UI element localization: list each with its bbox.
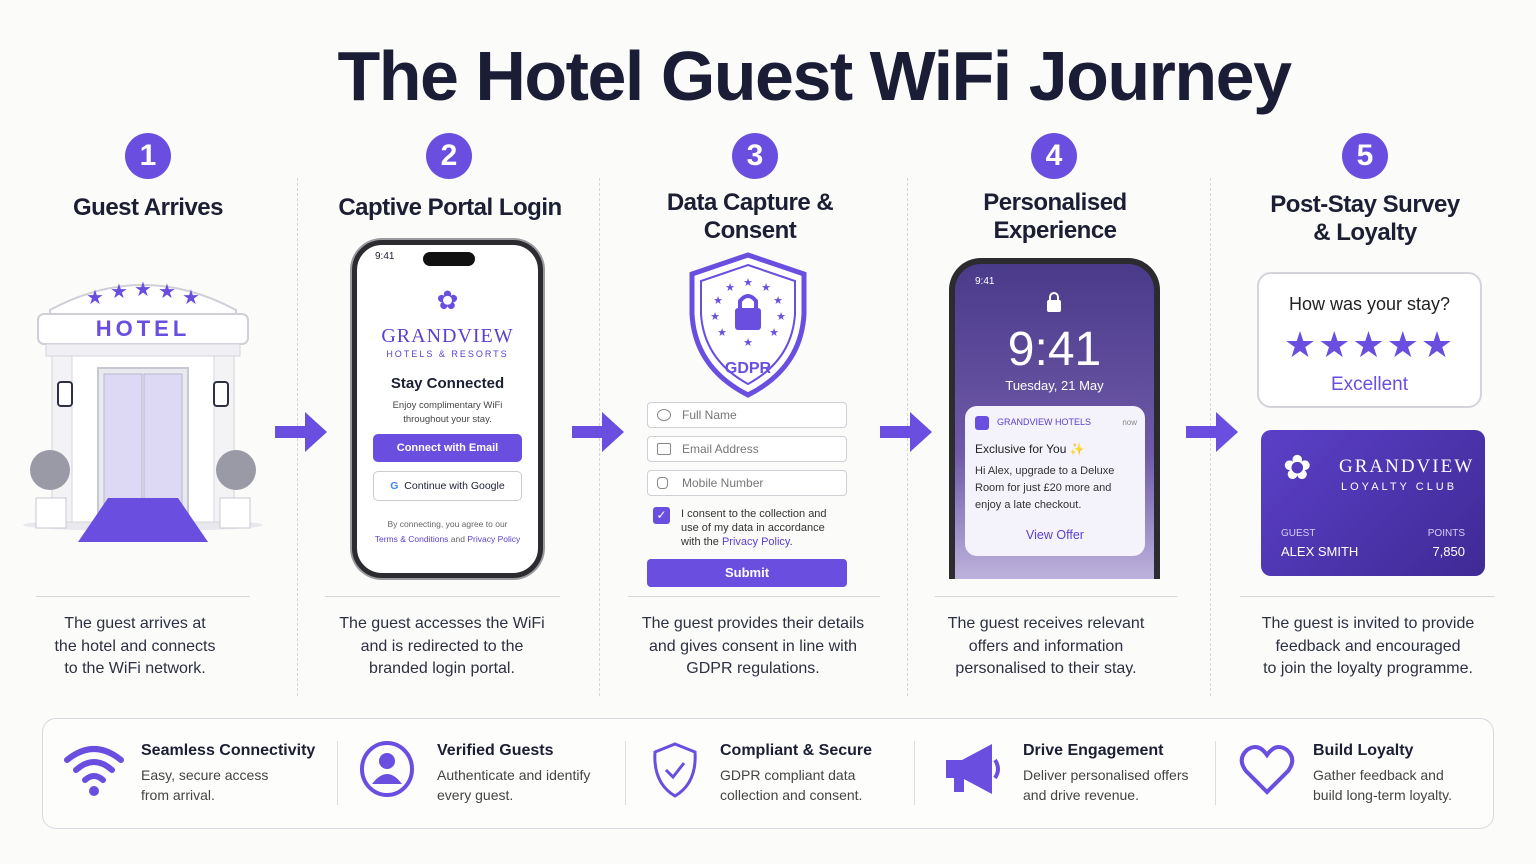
illustration: lock screen phone: Hi Alex, upgrade to a Deluxe bbox=[975, 465, 1114, 477]
illustration: survey bubble: ★★★★★ bbox=[1284, 324, 1455, 365]
text: branded login portal. bbox=[369, 660, 515, 677]
step numbers: 5 bbox=[1357, 139, 1373, 172]
illustration: GDPR shield: ★ bbox=[710, 311, 720, 323]
form: use of my data in accordance bbox=[681, 522, 825, 534]
text: Drive Engagement bbox=[1023, 742, 1163, 759]
loyalty card: ✿ bbox=[1283, 449, 1312, 487]
illustration: GDPR shield: ★ bbox=[773, 295, 783, 307]
form: with the Privacy Policy. bbox=[681, 536, 793, 548]
text: offers and information bbox=[969, 638, 1123, 654]
title: The Hotel Guest WiFi Journey bbox=[337, 37, 1291, 115]
form: I consent to the collection and bbox=[681, 508, 827, 520]
form: Full Name bbox=[682, 408, 737, 422]
illustration: survey bubble: How was your stay? bbox=[1289, 294, 1450, 314]
loyalty card: GUEST bbox=[1281, 528, 1315, 539]
illustration: hotel: ★ bbox=[110, 281, 128, 303]
text: GDPR compliant data bbox=[720, 767, 855, 783]
benefits bar bbox=[42, 718, 1494, 829]
loyalty card bbox=[1261, 430, 1485, 576]
text: from arrival. bbox=[141, 787, 215, 803]
loyalty card: 7,850 bbox=[1432, 544, 1465, 559]
illustration: lock screen phone: View Offer bbox=[1026, 528, 1084, 542]
loyalty card: ALEX SMITH bbox=[1281, 544, 1358, 559]
illustration: portal phone: 9:41 bbox=[375, 251, 394, 262]
descriptions: to the WiFi network. bbox=[64, 660, 206, 677]
illustration: hotel: ★ bbox=[182, 287, 200, 309]
text: collection and consent. bbox=[720, 787, 862, 803]
illustration: hotel: HOTEL bbox=[96, 316, 190, 341]
text: Experience bbox=[993, 217, 1117, 244]
icon: user bbox=[360, 741, 414, 797]
text: Authenticate and identify bbox=[437, 767, 590, 783]
loyalty card: LOYALTY CLUB bbox=[1341, 481, 1457, 493]
text: Compliant & Secure bbox=[720, 742, 872, 759]
text: The guest provides their details bbox=[642, 615, 864, 632]
text: Verified Guests bbox=[437, 742, 554, 759]
text: feedback and encouraged bbox=[1275, 638, 1461, 654]
form bbox=[647, 402, 847, 587]
illustration: lock screen phone: enjoy a late checkout. bbox=[975, 499, 1081, 511]
text: Data Capture & bbox=[667, 189, 833, 216]
text: Build Loyalty bbox=[1313, 742, 1413, 759]
text: Consent bbox=[704, 217, 796, 244]
text: Deliver personalised offers bbox=[1023, 767, 1188, 783]
step numbers: 3 bbox=[747, 139, 763, 172]
text: Gather feedback and bbox=[1313, 767, 1444, 783]
illustration: GDPR shield: GDPR bbox=[725, 360, 772, 377]
form: Mobile Number bbox=[682, 476, 763, 490]
form: ✓ bbox=[656, 508, 667, 522]
step numbers: 1 bbox=[140, 139, 156, 172]
illustration: lock screen phone: Room for just £20 more and bbox=[975, 482, 1111, 494]
text: The guest accesses the WiFi bbox=[339, 615, 545, 632]
illustration: portal phone: G Continue with Google bbox=[390, 480, 505, 492]
text: to join the loyalty programme. bbox=[1263, 660, 1473, 677]
illustration: portal phone: By connecting, you agree to our bbox=[387, 519, 508, 529]
form: Email Address bbox=[682, 442, 759, 456]
illustration: lock screen phone: 9:41 bbox=[975, 276, 994, 287]
illustration: portal phone: GRANDVIEW bbox=[381, 325, 514, 347]
illustration: lock screen phone: Tuesday, 21 May bbox=[1005, 378, 1104, 393]
illustration: GDPR shield bbox=[690, 252, 806, 398]
step numbers bbox=[125, 133, 1388, 179]
loyalty card: GRANDVIEW bbox=[1339, 456, 1474, 477]
icon: shield check bbox=[653, 742, 697, 798]
headings: Guest Arrives bbox=[73, 194, 223, 221]
step numbers: 4 bbox=[1046, 139, 1062, 172]
illustration: GDPR shield: ★ bbox=[761, 282, 771, 294]
illustration: portal phone: throughout your stay. bbox=[403, 414, 492, 425]
illustration: lock screen phone: GRANDVIEW HOTELS bbox=[997, 417, 1091, 427]
text: The guest receives relevant bbox=[948, 615, 1144, 632]
text: every guest. bbox=[437, 787, 513, 803]
illustration: survey bubble bbox=[1257, 272, 1482, 408]
illustration: portal phone: ✿ bbox=[437, 285, 458, 315]
illustration: survey bubble: Excellent bbox=[1331, 374, 1408, 395]
illustration: portal phone: Connect with Email bbox=[397, 442, 498, 454]
icon: megaphone bbox=[946, 744, 1000, 794]
descriptions: The guest arrives at bbox=[64, 615, 206, 632]
arrows bbox=[275, 412, 1238, 452]
text: Easy, secure access bbox=[141, 767, 268, 783]
text: and gives consent in line with bbox=[649, 638, 857, 654]
illustration: hotel: ★ bbox=[86, 287, 104, 309]
text: Captive Portal Login bbox=[338, 194, 562, 221]
illustration: lock screen phone: now bbox=[1122, 418, 1137, 427]
illustration: hotel bbox=[23, 279, 263, 542]
descriptions: the hotel and connects bbox=[54, 638, 216, 654]
icon: heart bbox=[1240, 745, 1294, 795]
illustration: GDPR shield: ★ bbox=[717, 327, 727, 339]
descriptions bbox=[54, 615, 216, 677]
loyalty card: POINTS bbox=[1428, 528, 1465, 539]
icon: wifi bbox=[64, 746, 124, 796]
text: The guest is invited to provide bbox=[1262, 615, 1474, 632]
step numbers: 2 bbox=[441, 139, 457, 172]
illustration: lock screen phone: Exclusive for You ✨ bbox=[975, 442, 1085, 456]
text: GDPR regulations. bbox=[686, 660, 820, 677]
form: Submit bbox=[725, 565, 769, 580]
text: and drive revenue. bbox=[1023, 787, 1139, 803]
text: Post-Stay Survey bbox=[1270, 191, 1460, 218]
illustration: portal phone: Terms & Conditions and Privacy Policy bbox=[375, 534, 520, 544]
illustration: GDPR shield: ★ bbox=[713, 295, 723, 307]
illustration: portal phone bbox=[352, 240, 543, 578]
text: build long-term loyalty. bbox=[1313, 787, 1452, 803]
illustration: GDPR shield: ★ bbox=[743, 337, 753, 349]
illustration: GDPR shield: ★ bbox=[743, 277, 753, 289]
illustration: GDPR shield: ★ bbox=[769, 327, 779, 339]
illustration: GDPR shield: ★ bbox=[725, 282, 735, 294]
text: personalised to their stay. bbox=[955, 660, 1137, 677]
illustration: GDPR shield: ★ bbox=[776, 311, 786, 323]
text: Personalised bbox=[983, 189, 1127, 216]
text: & Loyalty bbox=[1313, 219, 1417, 246]
illustration: portal phone: Stay Connected bbox=[391, 375, 504, 392]
text: Seamless Connectivity bbox=[141, 742, 315, 759]
illustration: lock screen phone: 9:41 bbox=[1008, 323, 1101, 376]
illustration: portal phone: HOTELS & RESORTS bbox=[386, 349, 509, 359]
illustration: hotel: ★ bbox=[158, 281, 176, 303]
illustration: portal phone: Enjoy complimentary WiFi bbox=[393, 400, 502, 411]
text: and is redirected to the bbox=[361, 638, 523, 654]
illustration: lock screen phone bbox=[949, 258, 1160, 579]
illustration: hotel: ★ bbox=[134, 279, 152, 301]
